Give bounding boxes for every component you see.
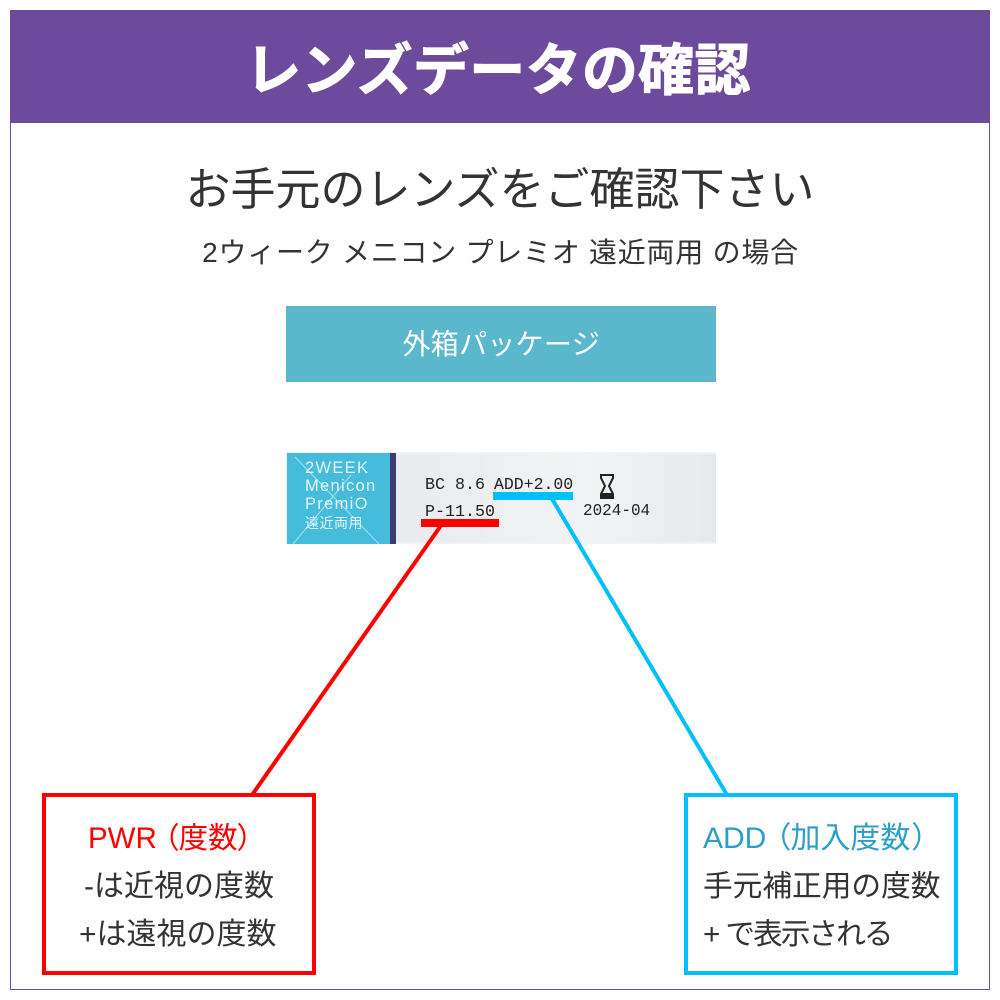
subheading: 2ウィーク メニコン プレミオ 遠近両用 の場合 — [202, 237, 799, 268]
heading: お手元のレンズをご確認下さい — [185, 164, 815, 215]
package grey panel — [396, 454, 716, 542]
package photo — [286, 452, 716, 544]
callout: ADD — [684, 793, 958, 975]
package product name: 遠近両用 — [305, 515, 363, 531]
section label: outer box package — [286, 306, 716, 382]
hourglass icon — [600, 474, 614, 499]
package product name — [305, 459, 376, 531]
expiry date: 2024-04 — [583, 502, 650, 521]
ADD value: ADD+2.00 — [494, 476, 573, 495]
BC value: BC 8.6 — [425, 476, 485, 495]
blue underline — [493, 492, 573, 500]
blue connector — [551, 497, 727, 795]
package product name: Menicon — [305, 477, 376, 495]
ADD heading: ADD （加入度数） — [703, 822, 927, 855]
package printed data — [425, 474, 650, 522]
package product name: 2WEEK — [305, 459, 369, 477]
package product name: PremiO — [305, 495, 369, 513]
title text: レンズデータの確認 — [245, 39, 751, 102]
PWR line 1: -は近視の度数 — [84, 870, 274, 903]
callout: PWR — [42, 793, 316, 975]
section label text: 外箱パッケージ — [402, 328, 600, 360]
red underline — [421, 519, 499, 527]
ADD line 1: 手元補正用の度数 — [703, 870, 940, 903]
PWR value: P-11.50 — [425, 503, 495, 522]
red connector — [252, 524, 442, 795]
package dark stripe — [390, 453, 396, 544]
PWR heading: PWR（度数） — [88, 822, 252, 855]
ADD line 2: +で表示される — [703, 918, 891, 951]
title banner — [10, 10, 990, 123]
PWR line 2: +は遠視の度数 — [79, 918, 277, 951]
package label sheen — [292, 456, 380, 544]
package blue label — [287, 453, 390, 544]
